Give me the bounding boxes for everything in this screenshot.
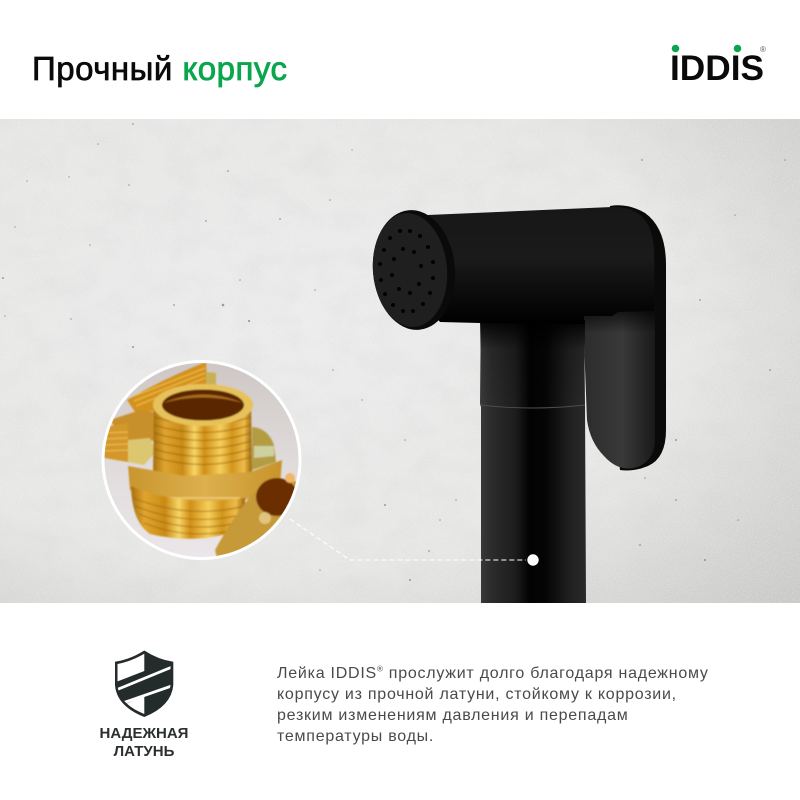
body <box>420 207 654 324</box>
description text: Лейка IDDIS® прослужит долго благодаря надежному <box>277 665 709 682</box>
side wings <box>252 427 276 470</box>
panel: footer <box>100 650 708 756</box>
shower head <box>368 205 666 603</box>
panel: photo with shower head on concrete wall <box>0 119 800 603</box>
hex nut <box>128 460 282 503</box>
vertical pipe <box>480 315 586 603</box>
upper threaded fitting <box>127 362 207 412</box>
icon: shield <box>115 650 174 717</box>
description text: резким изменениям давления и перепадам <box>277 707 628 724</box>
mounting plate <box>600 205 666 471</box>
callout: brass fitting lens <box>100 360 304 562</box>
icon caption <box>100 725 188 760</box>
callout leader line <box>290 519 526 560</box>
main thread <box>153 402 252 476</box>
lever <box>583 311 655 468</box>
panel: header <box>0 0 800 119</box>
lower thread <box>131 486 245 539</box>
icon caption: ЛАТУНЬ <box>114 743 174 760</box>
icon caption: НАДЕЖНАЯ <box>100 725 188 742</box>
callout dot <box>527 554 539 566</box>
description text <box>277 665 709 745</box>
title: Прочный корпус <box>32 50 287 87</box>
spray face <box>368 207 460 333</box>
description text: температуры воды. <box>277 728 434 745</box>
logo: IDDIS: ® <box>760 45 766 54</box>
concrete wall background <box>0 119 800 603</box>
right foreground fitting <box>215 480 298 562</box>
description text: корпусу из прочной латуни, стойкому к коррозии, <box>277 686 677 703</box>
